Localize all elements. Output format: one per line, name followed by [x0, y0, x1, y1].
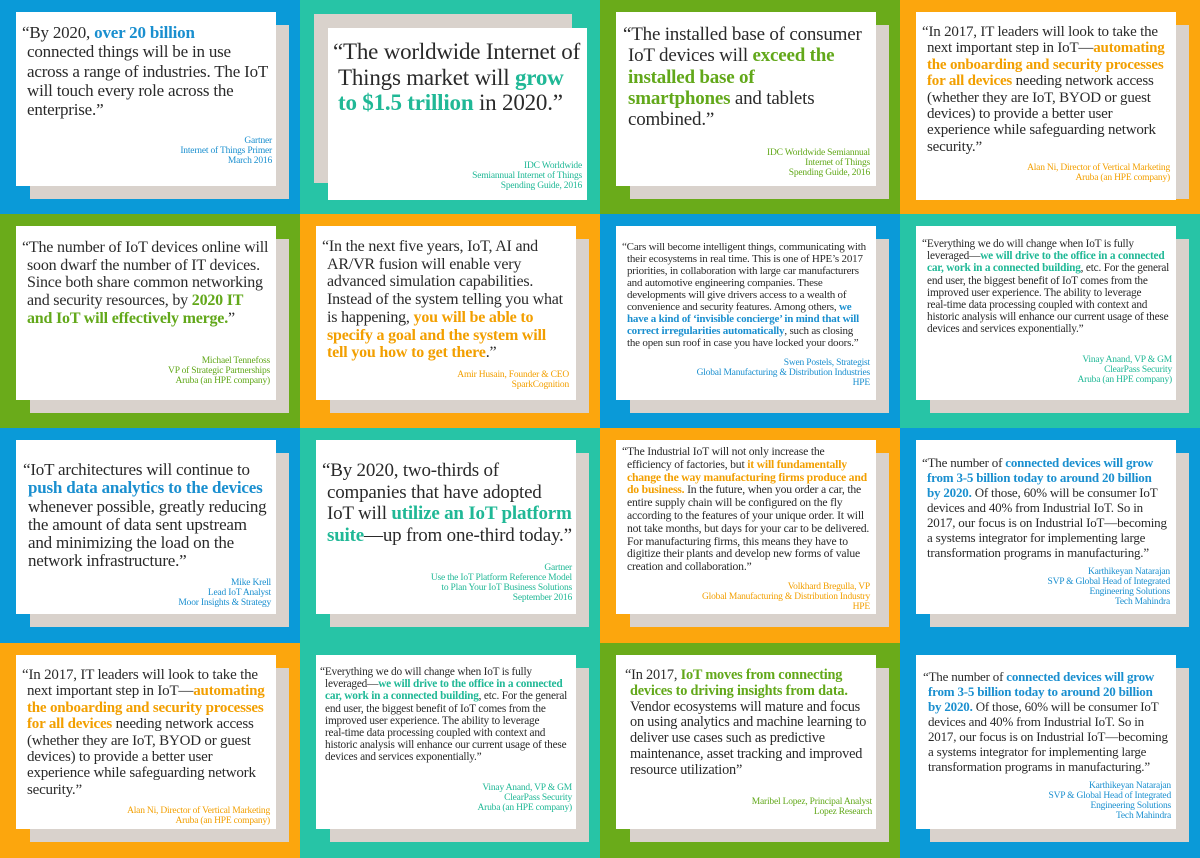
quote text: improved user experience. The ability to leverage: [325, 715, 539, 727]
quote text: car, work in a connected building, etc. For the general: [325, 690, 567, 702]
quote text: [320, 666, 568, 763]
quote text: on using analytics and machine learning to: [630, 714, 866, 730]
attribution: Aruba (an HPE company): [1075, 173, 1170, 183]
quote text: devices) to provide a better user: [27, 749, 212, 765]
attribution: [178, 578, 272, 608]
attribution: ClearPass Security: [1104, 365, 1172, 375]
quote text: Things market will grow: [338, 64, 564, 90]
attribution: Spending Guide, 2016: [501, 181, 582, 191]
quote text: end user, the biggest benefit of IoT comes from the: [927, 275, 1148, 287]
quote text: “In 2017, IT leaders will look to take the: [922, 24, 1158, 40]
quote text: car, work in a connected building, etc. For the general: [927, 262, 1169, 274]
quote text: [322, 460, 572, 546]
quote text: push data analytics to the devices: [28, 478, 263, 497]
quote text: Instead of the system telling you what: [327, 291, 563, 308]
quote text: will touch every role across the: [27, 81, 234, 100]
quote text: 2017, our focus is on Industrial IoT—becoming: [927, 515, 1167, 530]
attribution: IDC Worldwide Semiannual: [767, 148, 870, 158]
panel: IT and IoT merge: [0, 214, 300, 429]
quote text: and IoT will effectively merge.”: [27, 310, 235, 327]
quote text: combined.”: [628, 109, 714, 130]
quote text: specify a goal and the system will: [327, 327, 546, 344]
quote text: historic analysis will enhance our current usage of these: [927, 311, 1168, 323]
quote text: a systems integrator for implementing large: [928, 744, 1146, 759]
quote text: smartphones and tablets: [628, 88, 814, 109]
attribution: [477, 783, 572, 813]
panel: IT leaders automating onboarding: [900, 0, 1200, 215]
quote text: [333, 39, 580, 115]
quote text: [625, 667, 866, 778]
attribution: [1049, 781, 1172, 821]
quote text: “By 2020, over 20 billion: [22, 23, 195, 42]
quote text: [922, 24, 1165, 155]
quote text: “The installed base of consumer: [623, 24, 862, 45]
quote text: leveraged—we will drive to the office in a connected: [325, 678, 562, 690]
quote text: the amount of data sent upstream: [28, 515, 247, 534]
quote text: [623, 24, 862, 130]
attribution: [697, 358, 870, 388]
quote text: “The number of connected devices will grow: [923, 669, 1154, 684]
quote text: developments will give drivers access to a wealth of: [627, 289, 846, 301]
quote text: “By 2020, two-thirds of: [322, 460, 499, 481]
quote text: the onboarding and security processes: [27, 700, 264, 716]
quote text: devices to driving insights from data.: [630, 683, 848, 699]
attribution: to Plan Your IoT Business Solutions: [441, 583, 572, 593]
attribution: Swen Postels, Strategist: [784, 358, 870, 368]
quote text: “The number of connected devices will grow: [922, 455, 1153, 470]
quote text: companies that have adopted: [327, 482, 542, 502]
quote text: for all devices needing network access: [27, 716, 254, 732]
quote text: “In the next five years, IoT, AI and: [322, 238, 538, 255]
attribution: Lopez Research: [814, 807, 872, 817]
quote text: “In 2017, IT leaders will look to take the: [22, 667, 258, 683]
quote text: devices and 40% from Industrial IoT. So in: [928, 714, 1144, 729]
panel: IoT market 1.5 trillion: [300, 0, 600, 215]
quote text: [22, 23, 268, 119]
quote text: a systems integrator for implementing large: [927, 530, 1145, 545]
panel: insights from data: [600, 643, 900, 858]
quote text: 2017, our focus is on Industrial IoT—becoming: [928, 729, 1168, 744]
attribution: [180, 136, 272, 166]
quote text: efficiency of factories, but it will fundamentally: [627, 458, 847, 471]
quote text: improved user experience. The ability to leverage: [927, 287, 1141, 299]
attribution: HPE: [853, 602, 870, 612]
quote text: devices and 40% from Industrial IoT. So in: [927, 500, 1143, 515]
quote text: convenience and security features. Among others, we: [627, 301, 851, 313]
quote text: “Cars will become intelligent things, communicating with: [622, 241, 866, 253]
quote text: AR/VR fusion will enable very: [327, 256, 521, 273]
attribution: IDC Worldwide: [524, 161, 582, 171]
attribution: [1048, 567, 1170, 607]
quote text: from 3-5 billion today to around 20 billion: [927, 470, 1152, 485]
attribution: SVP & Global Head of Integrated: [1048, 577, 1170, 587]
quote text: devices) to provide a better user: [927, 106, 1112, 122]
quote text: priorities, in collaboration with large car manufacturers: [627, 265, 859, 277]
attribution: HPE: [853, 378, 870, 388]
quote text: installed base of: [628, 67, 754, 88]
quote text: real-time data processing coupled with context and: [325, 727, 545, 739]
quote text: “The worldwide Internet of: [333, 39, 580, 64]
attribution: Internet of Things Primer: [180, 146, 272, 156]
quote text: correct irregularities automatically, such as closing: [627, 325, 853, 337]
quote text: “In 2017, IoT moves from connecting: [625, 667, 842, 683]
attribution: Vinay Anand, VP & GM: [482, 783, 572, 793]
quote text: “Everything we do will change when IoT is fully: [922, 238, 1134, 250]
attribution: Spending Guide, 2016: [789, 168, 870, 178]
quote text: “The number of IoT devices online will: [22, 239, 268, 256]
attribution: [431, 563, 572, 603]
quote text: next important step in IoT—automating: [927, 40, 1165, 56]
quote text: “Everything we do will change when IoT is fully: [320, 666, 532, 678]
quote text: is happening, you will be able to: [327, 309, 533, 326]
attribution: [752, 797, 872, 817]
quote text: by 2020. Of those, 60% will be consumer IoT: [928, 699, 1158, 714]
quote text: and minimizing the load on the: [28, 533, 234, 552]
quote text: historic analysis will enhance our current usage of these: [325, 739, 566, 751]
attribution: Amir Husain, Founder & CEO: [457, 370, 569, 380]
quote text: the open sun roof in case you have locked your doors.”: [627, 337, 858, 349]
quote text: across a range of industries. The IoT: [27, 62, 268, 81]
quote text: tell you how to get there.”: [327, 344, 496, 361]
attribution: Tech Mahindra: [1115, 597, 1170, 607]
quote text: For manufacturing firms, this means they have to: [627, 535, 848, 548]
panel: IT leaders automating onboarding (repeat): [0, 643, 300, 858]
quote text: [622, 241, 866, 349]
quote text: [22, 667, 265, 798]
quote text: deliver use cases such as predictive: [630, 730, 825, 746]
attribution: Lead IoT Analyst: [208, 588, 271, 598]
quote text: end user, the biggest benefit of IoT comes from the: [325, 703, 546, 715]
quote text: creation and collaboration.”: [627, 560, 752, 573]
quote text: have a kind of ‘invisible concierge’ in mind that will: [627, 313, 859, 325]
attribution: Gartner: [544, 563, 572, 573]
quote text: resource utilization”: [630, 762, 742, 778]
panel: connected devices 20 billion (repeat): [900, 643, 1200, 858]
panel: cars as intelligent things: [600, 214, 900, 429]
quote text: devices and services exponentially.”: [325, 751, 481, 763]
attribution: Michael Tennefoss: [202, 356, 270, 366]
quote text: IoT devices will exceed the: [628, 45, 834, 66]
attribution: Vinay Anand, VP & GM: [1082, 355, 1172, 365]
quote text: by 2020. Of those, 60% will be consumer IoT: [927, 485, 1157, 500]
attribution: September 2016: [513, 593, 572, 603]
attribution: SVP & Global Head of Integrated: [1049, 791, 1171, 801]
attribution: Aruba (an HPE company): [175, 816, 270, 826]
quote text: entire supply chain will be configured on the fly: [627, 496, 842, 509]
quote text: according to the features of your unique order. It will: [627, 509, 864, 522]
quote text: real-time data processing coupled with context and: [927, 299, 1147, 311]
quote text: advanced simulation capabilities.: [327, 273, 533, 290]
attribution: Maribel Lopez, Principal Analyst: [752, 797, 872, 807]
attribution: Global Manufacturing & Distribution Industry: [702, 592, 870, 602]
panel: IoT AI AR/VR fusion: [300, 214, 600, 429]
attribution: Alan Ni, Director of Vertical Marketing: [1027, 163, 1170, 173]
attribution: Global Manufacturing & Distribution Industries: [697, 368, 870, 378]
quote text: [923, 669, 1168, 774]
quote text: from 3-5 billion today to around 20 billion: [928, 684, 1153, 699]
attribution: Aruba (an HPE company): [1077, 375, 1172, 385]
quote text: IoT will utilize an IoT platform: [327, 503, 572, 524]
attribution: [767, 148, 870, 178]
attribution: Karthikeyan Natarajan: [1088, 567, 1170, 577]
quote text: Vendor ecosystems will mature and focus: [630, 699, 860, 715]
quote text: and security resources, by 2020 IT: [27, 292, 243, 309]
attribution: [1027, 163, 1170, 183]
attribution: Volkhard Bregulla, VP: [788, 582, 870, 592]
quote text: the onboarding and security processes: [927, 57, 1164, 73]
quote text: digitize their plants and develop new forms of value: [627, 547, 860, 560]
quote text: transformation programs in manufacturing.”: [927, 545, 1149, 560]
attribution: Tech Mahindra: [1116, 811, 1171, 821]
attribution: Gartner: [244, 136, 272, 146]
quote text: do business. In the future, when you order a car, the: [627, 483, 861, 496]
attribution: [168, 356, 270, 386]
quote text: security.”: [27, 782, 82, 798]
attribution: Moor Insights & Strategy: [178, 598, 271, 608]
quote text: transformation programs in manufacturing.”: [928, 759, 1150, 774]
attribution: Aruba (an HPE company): [477, 803, 572, 813]
quote text: enterprise.”: [27, 100, 103, 119]
quote text: experience while safeguarding network: [927, 122, 1156, 138]
quote text: [622, 445, 869, 573]
attribution: ClearPass Security: [504, 793, 572, 803]
quote text: soon dwarf the number of IT devices.: [27, 257, 260, 274]
attribution: March 2016: [228, 156, 272, 166]
attribution: Aruba (an HPE company): [175, 376, 270, 386]
attribution: Semiannual Internet of Things: [472, 171, 582, 181]
panel: consumer IoT exceeds smartphones: [600, 0, 900, 215]
attribution: Use the IoT Platform Reference Model: [431, 573, 572, 583]
panel: push analytics to devices: [0, 428, 300, 643]
quote text: Since both share common networking: [27, 274, 263, 291]
quote text: experience while safeguarding network: [27, 765, 256, 781]
attribution: Engineering Solutions: [1090, 801, 1171, 811]
attribution: Engineering Solutions: [1089, 587, 1170, 597]
quote text: [22, 239, 268, 327]
attribution: [127, 806, 270, 826]
quote text: to $1.5 trillion in 2020.”: [338, 90, 563, 115]
quote text: [922, 455, 1167, 560]
attribution: [702, 582, 870, 612]
quote text: [322, 238, 563, 361]
quote text: leveraged—we will drive to the office in a connected: [927, 250, 1164, 262]
quote text: (whether they are IoT, BYOD or guest: [27, 733, 251, 749]
attribution: [457, 370, 570, 390]
quote text: connected things will be in use: [27, 42, 231, 61]
panel: connected car and building (repeat): [300, 643, 600, 858]
attribution: Internet of Things: [805, 158, 870, 168]
quote text: for all devices needing network access: [927, 73, 1154, 89]
quote text: [23, 460, 266, 570]
quote text: “The Industrial IoT will not only increase the: [622, 445, 825, 458]
panel: IoT platform suite: [300, 428, 600, 643]
quote text: (whether they are IoT, BYOD or guest: [927, 90, 1151, 106]
attribution: Alan Ni, Director of Vertical Marketing: [127, 806, 270, 816]
attribution: VP of Strategic Partnerships: [168, 366, 270, 376]
attribution: SparkCognition: [512, 380, 569, 390]
quote text: maintenance, asset tracking and improved: [630, 746, 862, 762]
panel: connected devices 20 billion: [900, 428, 1200, 643]
attribution: [472, 161, 582, 191]
quote text: suite—up from one-third today.”: [327, 524, 572, 546]
quote text: security.”: [927, 139, 982, 155]
quote text: whenever possible, greatly reducing: [28, 497, 266, 516]
quote text: devices and services exponentially.”: [927, 323, 1083, 335]
attribution: [1077, 355, 1172, 385]
attribution: Mike Krell: [231, 578, 271, 588]
quote text: [922, 238, 1170, 335]
panel: 20 billion connected things: [0, 0, 300, 215]
quote text: network infrastructure.”: [28, 551, 187, 570]
attribution: Karthikeyan Natarajan: [1089, 781, 1171, 791]
quote text: their ecosystems in real time. This is one of HPE’s 2017: [627, 253, 863, 265]
quote text: change the way manufacturing firms produce and: [627, 471, 867, 484]
panel: connected car and building: [900, 214, 1200, 429]
quote text: and automotive engineering companies. These: [627, 277, 823, 289]
quote text: not take months, but days for your car to be delivered.: [627, 522, 869, 535]
panel: industrial IoT changes manufacturing: [600, 428, 900, 643]
quote text: next important step in IoT—automating: [27, 683, 265, 699]
quote text: “IoT architectures will continue to: [23, 460, 250, 479]
